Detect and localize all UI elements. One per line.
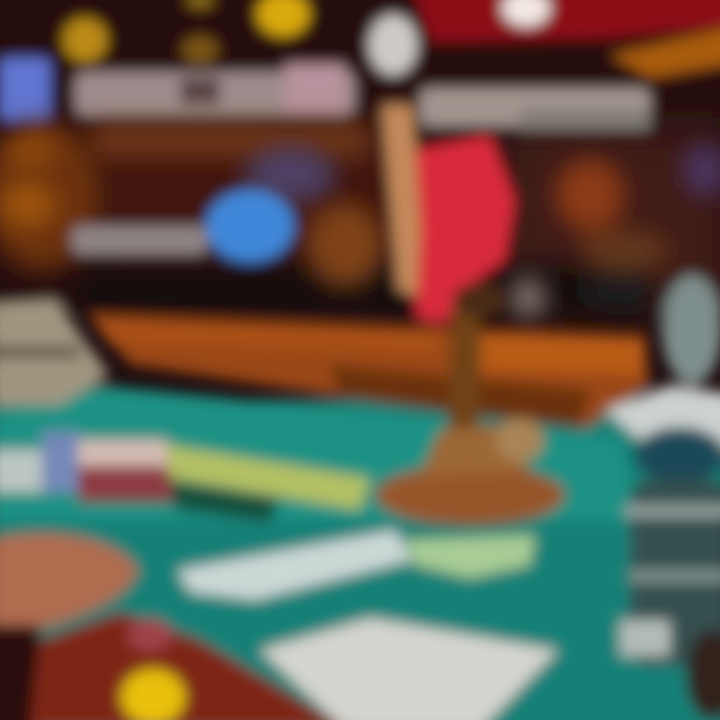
background: upper wall [0,0,720,315]
card strip left [0,432,173,502]
pale sign band right [420,88,650,130]
peach column [382,105,425,300]
gavel handle [448,300,482,440]
chip stack right [605,275,720,665]
pale band middle left [72,226,207,254]
red drape [415,135,515,325]
yellow lights [63,0,309,64]
green yellow strip [165,445,370,522]
white lights [369,0,550,75]
pink reflection [128,619,172,651]
dark corner bottom right [686,630,720,720]
gavel block [375,418,565,525]
right orange figures [512,144,720,318]
top right red banner [410,0,720,78]
wood strip under signs [90,122,370,158]
blue screen left [0,58,50,120]
hand left [0,533,138,640]
green note [405,535,535,578]
wooden bench [90,315,650,428]
wooden table corner [30,612,350,720]
gavel [375,282,565,525]
white paper bottom [260,618,558,720]
teal table [0,385,720,720]
brown figure middle [307,203,383,287]
dark shadow under hand [0,625,40,720]
orange brown decoration left [0,120,100,270]
dim purple haze [245,147,335,203]
pale sign band left [75,64,355,116]
yellow light bottom [121,669,185,720]
beige stack left [0,300,110,405]
white paper middle [178,530,412,600]
gavel head top [454,282,506,318]
blue globe [206,190,294,262]
